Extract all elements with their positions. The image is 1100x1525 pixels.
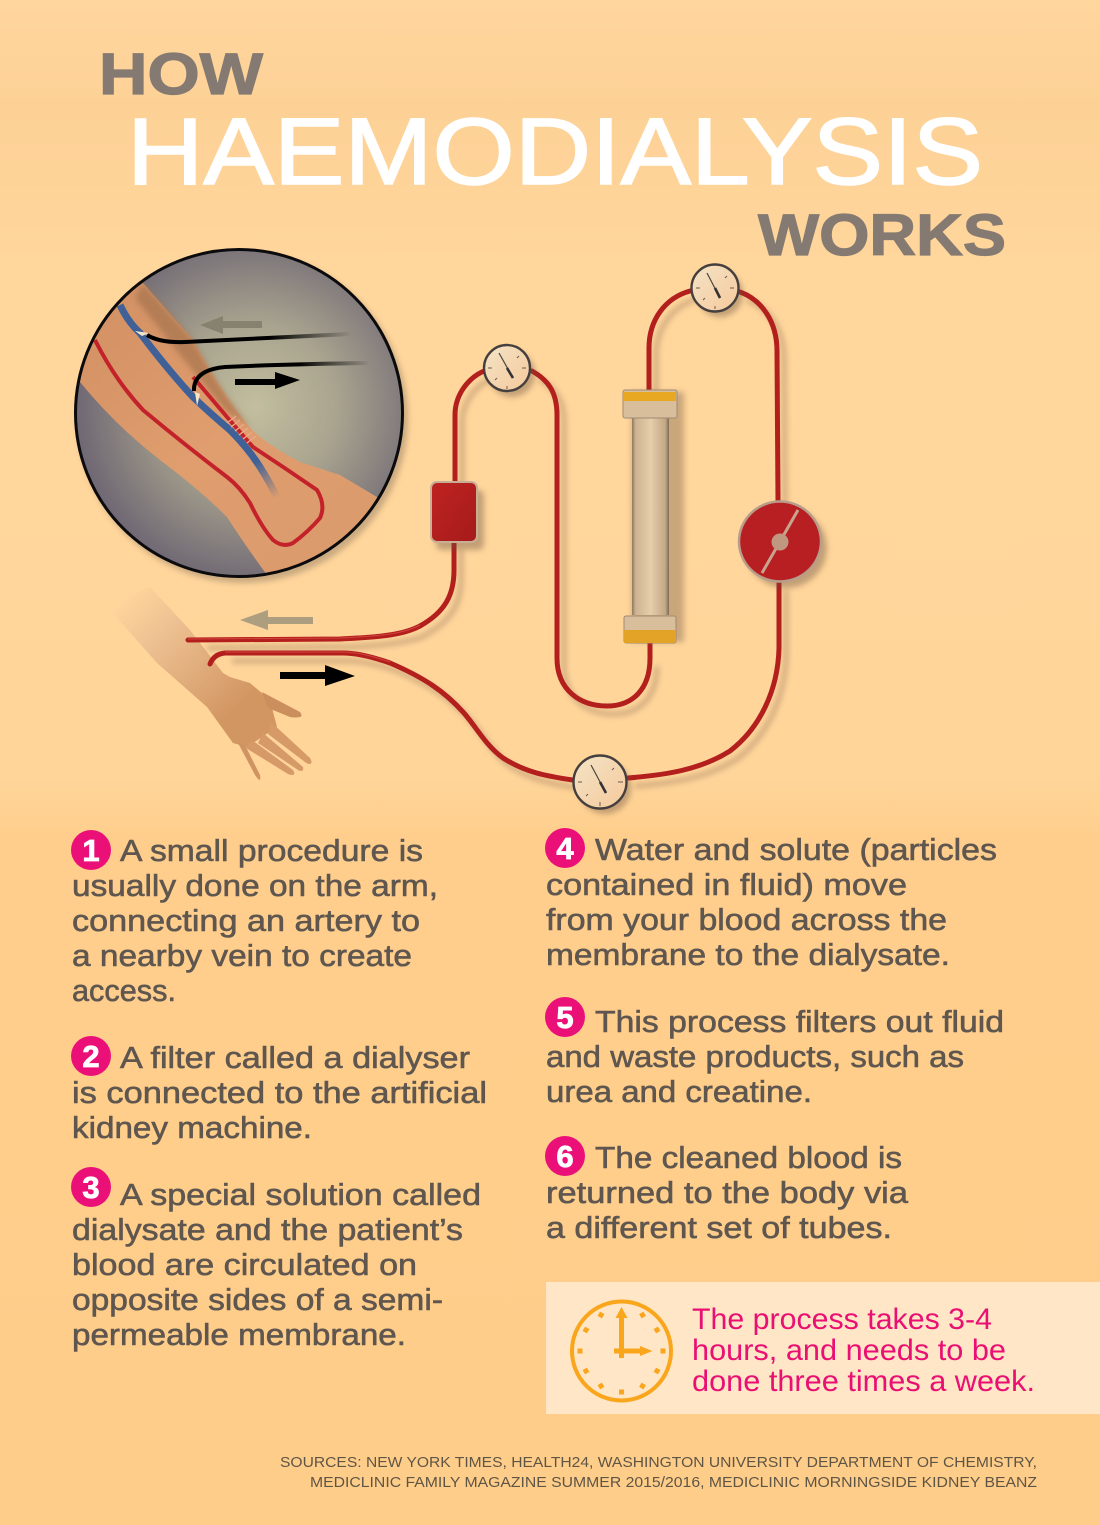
roller pump wheel <box>739 502 827 588</box>
step 2: is connected to the artificial <box>72 1075 487 1110</box>
dialyser filter <box>623 390 684 643</box>
bottom cap <box>624 616 676 643</box>
sources <box>280 1455 1037 1491</box>
sources: SOURCES: NEW YORK TIMES, HEALTH24, WASHINGTON UNIVERSITY DEPARTMENT OF CHEMISTRY, <box>280 1455 1037 1471</box>
step 6: returned to the body via <box>546 1175 909 1210</box>
ring finger <box>246 740 294 775</box>
step 6: a different set of tubes. <box>546 1210 892 1245</box>
step 6: 6 <box>556 1139 574 1174</box>
step 4: 4 <box>556 831 574 866</box>
step 3 <box>71 1167 481 1352</box>
step 1: usually done on the arm, <box>72 868 438 903</box>
middle finger <box>258 733 303 771</box>
index finger <box>268 722 312 764</box>
step 3: opposite sides of a semi- <box>72 1282 443 1317</box>
step 1 <box>71 830 438 1008</box>
fistula stitches <box>227 416 256 443</box>
step 5: and waste products, such as <box>546 1039 964 1074</box>
black tube two <box>194 363 368 391</box>
step 6 <box>545 1136 909 1245</box>
step 5: 5 <box>556 1000 574 1035</box>
sources: MEDICLINIC FAMILY MAGAZINE SUMMER 2015/2016, MEDICLINIC MORNINGSIDE KIDNEY BEANZ <box>310 1475 1037 1491</box>
callout text: The process takes 3-4 <box>692 1303 992 1336</box>
icon: clock <box>572 1302 671 1400</box>
magnified arm circle <box>60 249 408 583</box>
step 2: A filter called a dialyser <box>120 1040 470 1075</box>
step 1: A small procedure is <box>120 833 423 868</box>
blood tubing <box>188 291 779 780</box>
forearm and palm <box>110 587 277 747</box>
step 2: kidney machine. <box>72 1110 312 1145</box>
step 5 <box>545 997 1004 1109</box>
step 6: The cleaned blood is <box>595 1140 902 1175</box>
step 3: permeable membrane. <box>72 1317 406 1352</box>
title: WORKS <box>758 203 1006 268</box>
title <box>99 42 1006 268</box>
arm upper shading <box>135 283 250 428</box>
tubing shadow <box>207 299 786 788</box>
step 1: connecting an artery to <box>72 903 420 938</box>
top cap <box>623 390 677 418</box>
step 1: a nearby vein to create <box>72 938 412 973</box>
step 4: contained in fluid) move <box>546 867 907 902</box>
grey arrow <box>200 316 262 334</box>
grey left arrow <box>240 610 313 630</box>
step 4: Water and solute (particles <box>595 832 997 867</box>
magnified arm skin <box>80 283 378 573</box>
thumb <box>262 692 302 718</box>
pressure gauge: top right <box>692 264 743 317</box>
step 4: membrane to the dialysate. <box>546 937 950 972</box>
callout: treatment time <box>546 1282 1100 1414</box>
red blood pump box <box>431 482 484 550</box>
vein fading end <box>230 430 277 497</box>
needles <box>135 331 200 406</box>
vein <box>120 305 230 430</box>
step 5: This process filters out fluid <box>595 1004 1004 1039</box>
callout text <box>692 1303 1035 1398</box>
pressure gauge: top left <box>484 345 535 397</box>
step 1: access. <box>72 973 176 1008</box>
step 2 <box>71 1036 487 1145</box>
step 3: dialysate and the patient’s <box>72 1212 463 1247</box>
callout text: done three times a week. <box>692 1365 1035 1398</box>
step 2: 2 <box>82 1039 100 1074</box>
step 3: 3 <box>82 1170 100 1205</box>
callout text: hours, and needs to be <box>692 1334 1006 1367</box>
pressure gauge: bottom <box>574 756 631 814</box>
black right arrow <box>280 665 355 686</box>
black arrow <box>235 372 300 389</box>
title: HOW <box>99 42 263 107</box>
little finger <box>238 743 260 780</box>
black tube one <box>147 334 350 342</box>
step 4 <box>545 828 997 972</box>
step 4: from your blood across the <box>546 902 947 937</box>
artery loop <box>95 340 322 545</box>
step 1: 1 <box>82 833 100 868</box>
title: HAEMODIALYSIS <box>127 99 983 205</box>
step 3: blood are circulated on <box>72 1247 417 1282</box>
step 5: urea and creatine. <box>546 1074 812 1109</box>
step 3: A special solution called <box>120 1177 481 1212</box>
small arm and hand <box>110 587 312 780</box>
